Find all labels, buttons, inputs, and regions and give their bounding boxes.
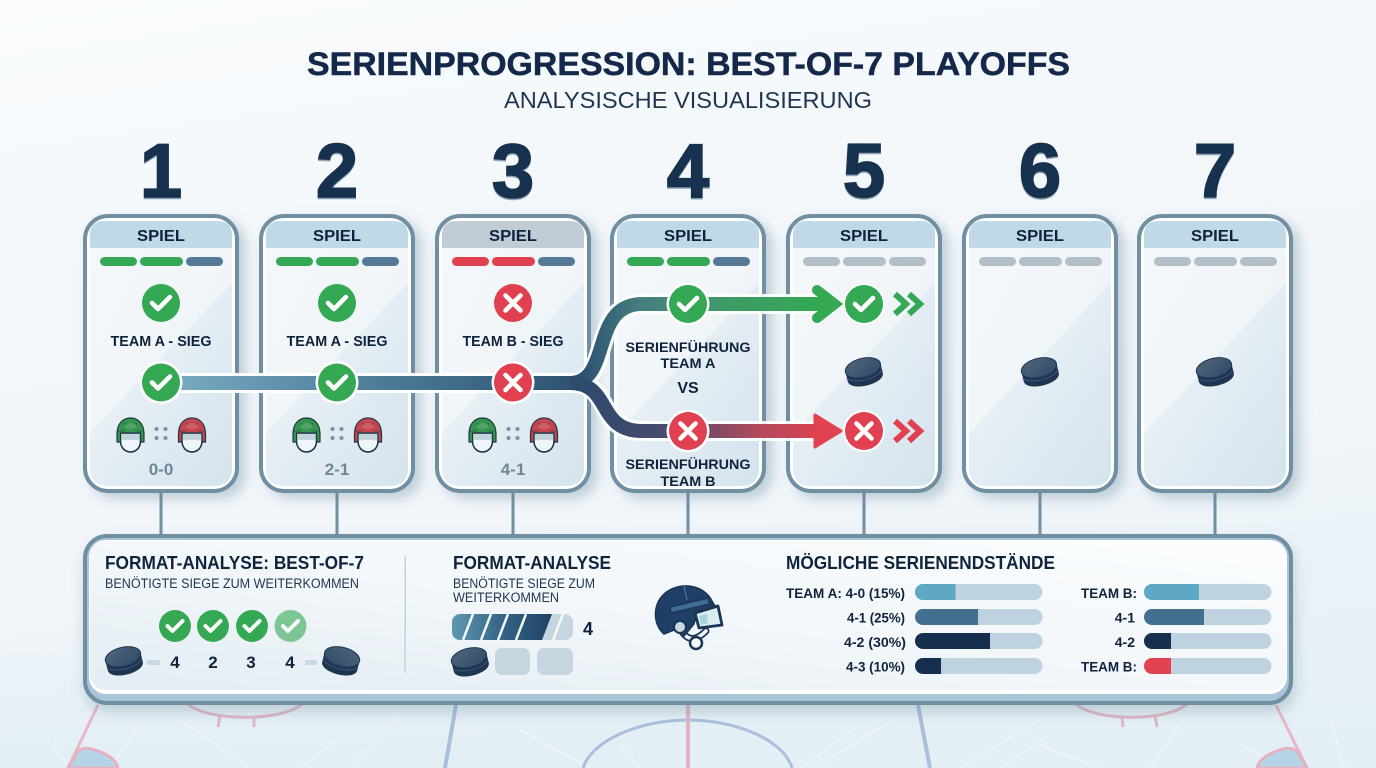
icon: red double chevron [895, 421, 920, 441]
panel: game 1 [85, 216, 237, 491]
game numbers: 5 [843, 129, 885, 214]
divider [404, 556, 406, 673]
series flow with fork [161, 290, 841, 447]
chart: possible series results: MÖGLICHE SERIENENDSTÄNDE [786, 553, 1055, 573]
panel: game 4: SERIENFÜHRUNG [626, 339, 751, 355]
game numbers: 6 [1019, 129, 1061, 214]
flow nodes [140, 282, 885, 452]
panel: game 5: SPIEL [840, 228, 888, 245]
panel: game 2: TEAM A - SIEG [286, 333, 388, 350]
subtitle: ANALYSISCHE VISUALISIERUNG [504, 87, 872, 113]
chart: possible series results: TEAM B: [1081, 586, 1137, 601]
panel: game 7 [1139, 216, 1291, 491]
format analysis left: 4 [170, 653, 180, 672]
format analysis left [103, 553, 364, 679]
format analysis middle: 4 [583, 619, 593, 639]
icon: helmet [655, 586, 722, 649]
panel: game 4: TEAM A [660, 355, 716, 371]
panel: game 4: TEAM B [661, 473, 715, 489]
panel: game 1: SPIEL [137, 228, 185, 245]
panel: game 2 [261, 216, 413, 491]
panel: game 3: 4-1 [501, 460, 525, 479]
game numbers: 1 [140, 129, 182, 214]
format analysis middle: FORMAT-ANALYSE [453, 553, 611, 573]
game numbers: 2 [316, 129, 358, 214]
format analysis left: 2 [208, 653, 218, 672]
connectors to analysis panel [161, 492, 1215, 536]
panel: game 4: VS [677, 380, 699, 397]
chart: possible series results: 4-2 [1115, 634, 1135, 650]
panel: game 4 [612, 216, 764, 491]
chart: possible series results: 4-1 [1115, 610, 1135, 626]
format analysis middle: BENÖTIGTE SIEGE ZUM [453, 576, 595, 591]
panel: game 3: SPIEL [489, 228, 537, 245]
panel: game 4: SPIEL [664, 228, 712, 245]
panel: game 1: 0-0 [149, 460, 173, 479]
chart: possible series results: 4-1 (25%) [847, 610, 905, 626]
format analysis left: FORMAT-ANALYSE: BEST-OF-7 [105, 553, 364, 573]
format analysis left: 3 [246, 653, 256, 672]
panel: game 6 [964, 216, 1116, 491]
panel: game 5 [788, 216, 940, 491]
game numbers: 4 [667, 129, 709, 214]
panel: game 7: SPIEL [1191, 228, 1239, 245]
format analysis left: 4 [285, 653, 295, 672]
panel: game 3: TEAM B - SIEG [462, 333, 564, 350]
format analysis middle: WEITERKOMMEN [453, 590, 559, 605]
game numbers: 3 [492, 129, 534, 214]
chart: possible series results: TEAM A: 4-0 (15%) [786, 586, 905, 601]
panel: game 4: SERIENFÜHRUNG [626, 456, 751, 472]
game numbers: 7 [1194, 129, 1236, 214]
chart: possible series results: 4-3 (10%) [846, 660, 905, 674]
panel: game 6: SPIEL [1016, 228, 1064, 245]
icon: green double chevron [895, 294, 920, 314]
panel: game 3 [437, 216, 589, 491]
format analysis left: BENÖTIGTE SIEGE ZUM WEITERKOMMEN [105, 576, 359, 591]
rink markings [0, 640, 1376, 768]
title: SERIENPROGRESSION: BEST-OF-7 PLAYOFFS [307, 46, 1070, 82]
chart: possible series results: 4-2 (30%) [844, 635, 906, 650]
panel: analysis [85, 536, 1291, 703]
panel: game 2: SPIEL [313, 228, 361, 245]
format analysis middle [449, 553, 611, 680]
chart: possible series results: TEAM B: [1081, 660, 1137, 674]
chart: possible series results [786, 553, 1272, 674]
panel: game 2: 2-1 [325, 460, 349, 479]
game numbers [140, 129, 1236, 214]
panel: game 1: TEAM A - SIEG [110, 333, 212, 350]
